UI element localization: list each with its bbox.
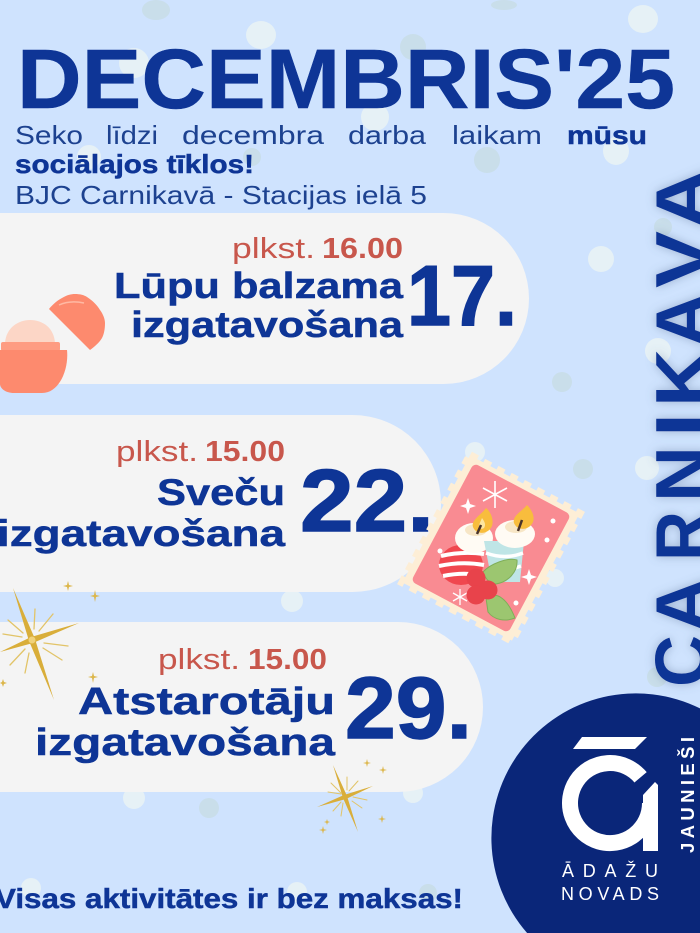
logo badge	[491, 693, 700, 933]
intro text: līdzi	[106, 120, 158, 150]
panel: event 22	[0, 415, 441, 592]
logo wordmark	[561, 861, 659, 904]
event time: plkst.	[116, 436, 198, 468]
icon: gold star right	[317, 759, 387, 834]
event name	[0, 472, 286, 554]
intro text: BJC Carnikavā - Stacijas ielā 5	[15, 180, 427, 210]
event time: plkst.	[158, 644, 240, 676]
sparkles	[438, 498, 556, 606]
event name: Lūpu balzama	[114, 265, 404, 306]
logo side label: JAUNIEŠI	[677, 737, 698, 853]
holly leaves	[483, 559, 517, 620]
intro text	[15, 120, 647, 210]
icon: lip balm	[0, 294, 105, 393]
intro text: Seko	[15, 120, 83, 150]
event name	[35, 681, 336, 764]
event time	[232, 233, 403, 265]
event name: izgatavošana	[0, 513, 286, 554]
panel: event 17	[0, 213, 529, 384]
icon: candle stamp	[402, 455, 580, 641]
event name: izgatavošana	[131, 304, 404, 345]
event time: plkst.	[232, 233, 315, 265]
footer note: Visas aktivitātes ir bez maksas!	[0, 883, 463, 914]
panel: event 29	[0, 622, 483, 792]
vertical heading: Carnikava	[640, 168, 700, 687]
event date: 22.	[300, 451, 434, 550]
event name	[114, 265, 404, 345]
event date: 29.	[345, 660, 472, 757]
event name: Atstarotāju	[78, 681, 335, 723]
candle: teal	[484, 505, 535, 582]
event date: 17.	[407, 249, 517, 344]
logo mark	[570, 737, 658, 851]
intro text: darba	[348, 120, 427, 150]
logo wordmark: NOVADS	[561, 884, 659, 904]
candle: striped	[439, 508, 493, 585]
title: DECEMBRIS'25	[17, 32, 675, 126]
intro text: laikam	[452, 120, 542, 150]
event time: 16.00	[322, 233, 403, 265]
intro text: sociālajos tīklos!	[15, 149, 254, 179]
holly berries	[466, 568, 498, 604]
event time: 15.00	[205, 436, 285, 468]
icon: gold star left	[0, 581, 100, 700]
intro text: mūsu	[567, 120, 647, 150]
event time: 15.00	[248, 644, 327, 676]
intro text: decembra	[182, 120, 325, 150]
event name: Sveču	[157, 472, 285, 513]
snowflakes	[453, 481, 507, 605]
logo wordmark: ĀDAŽU	[562, 861, 658, 881]
event time	[116, 436, 285, 468]
event name: izgatavošana	[35, 722, 336, 764]
event time	[158, 644, 327, 676]
